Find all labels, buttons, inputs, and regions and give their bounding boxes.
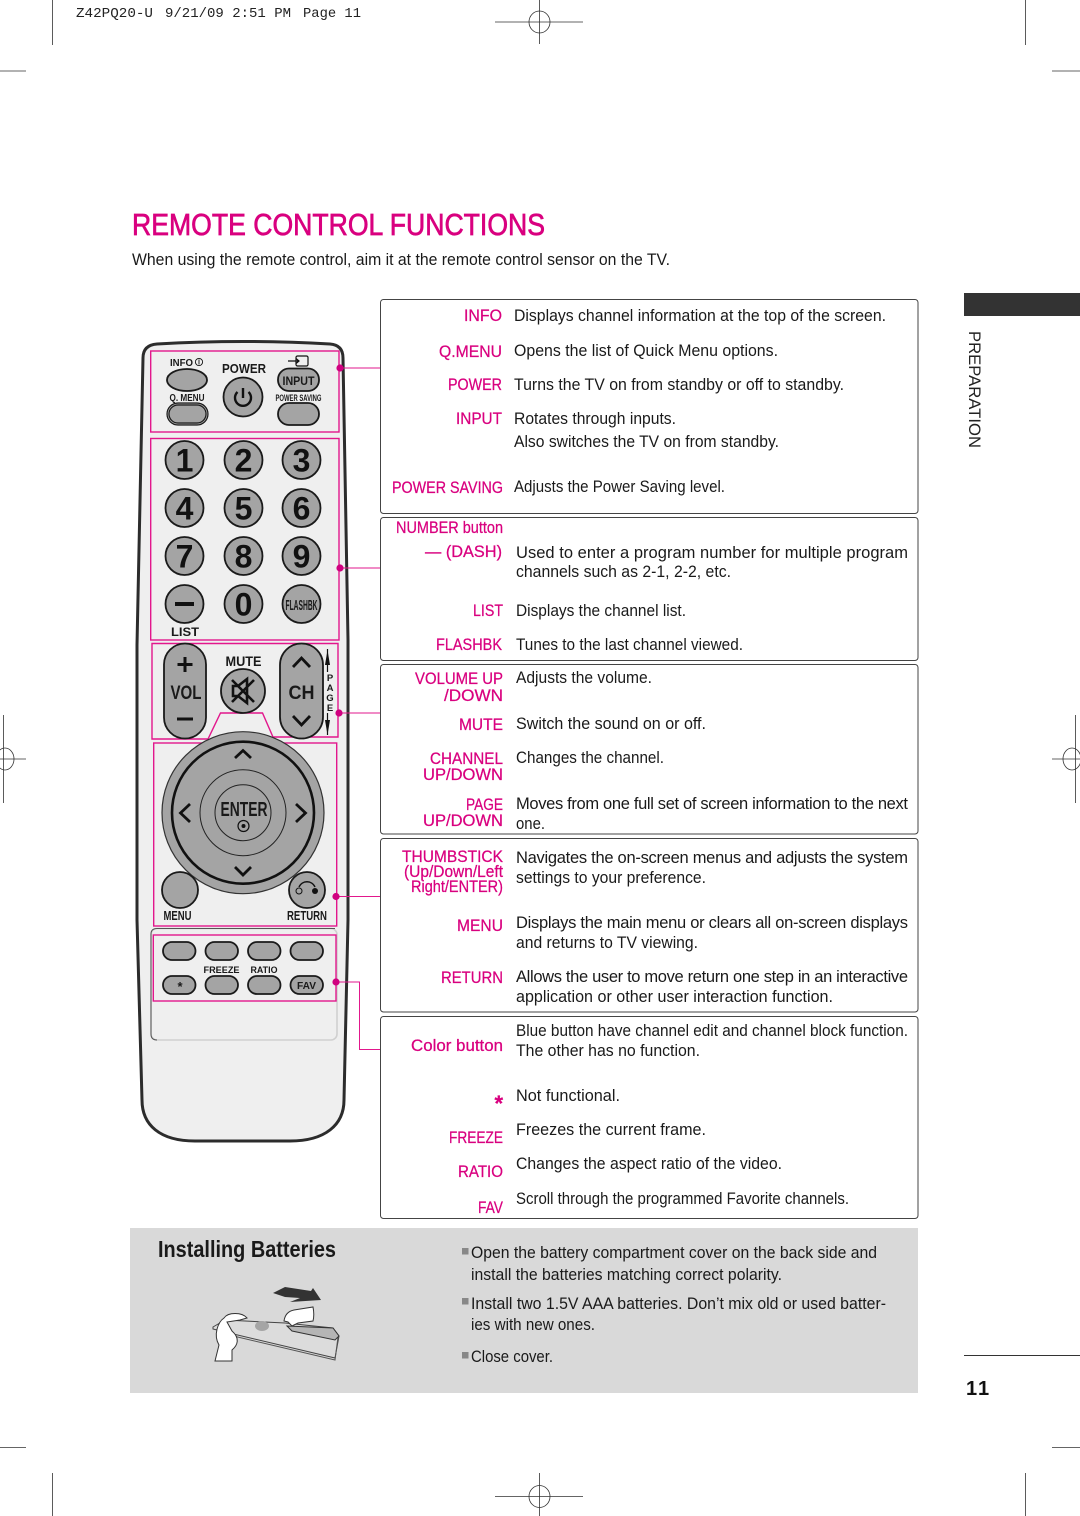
- panel: volume, mute, channel, page: one.: [516, 815, 545, 833]
- volume, mute and channel group: VOL: [170, 683, 202, 704]
- top button group: [151, 351, 339, 432]
- battery installation instructions: install the batteries matching correct polarity.: [471, 1266, 782, 1284]
- icon: battery cover removal: [213, 1287, 339, 1361]
- volume, mute and channel group: A: [327, 683, 334, 694]
- number keypad: 8: [235, 538, 252, 574]
- section tab: preparation: PREPARATION: [965, 331, 983, 448]
- panel: info and power functions: INPUT: [456, 410, 502, 428]
- volume, mute and channel group: P: [327, 673, 334, 684]
- volume, mute and channel group: [152, 644, 338, 739]
- footer rule: [964, 1354, 1080, 1356]
- panel: color buttons and extras: FAV: [478, 1199, 503, 1217]
- intro text: When using the remote control, aim it at the remote control sensor on the TV.: [132, 251, 670, 269]
- panel: thumbstick, menu, return: Displays the main menu or clears all on-screen displays: [516, 914, 908, 932]
- number keypad: 6: [293, 490, 310, 526]
- panel: thumbstick, menu, return: RETURN: [441, 969, 503, 987]
- panel: installing batteries: [130, 1228, 918, 1393]
- number keypad: 3: [293, 442, 310, 478]
- print slug line: [76, 7, 361, 22]
- panel: color buttons and extras: Not functional.: [516, 1087, 620, 1105]
- top button group: INPUT: [282, 374, 315, 388]
- page number: 11: [966, 1378, 991, 1400]
- panel: info and power functions: Adjusts the Power Saving level.: [514, 478, 725, 496]
- panel: color buttons and extras: RATIO: [458, 1163, 503, 1181]
- top button group: INFO: [170, 357, 193, 369]
- number keypad: LIST: [171, 625, 200, 639]
- panel: thumbstick, menu, return: [380, 838, 918, 1012]
- panel: color buttons and extras: FREEZE: [449, 1129, 503, 1147]
- panel: number buttons: [380, 518, 918, 660]
- panel: volume, mute, channel, page: VOLUME UP: [415, 670, 503, 688]
- number keypad: 9: [293, 538, 310, 574]
- panel: thumbstick, menu, return: Allows the user to move return one step in an interactive: [516, 968, 908, 986]
- top button group: POWER SAVING: [276, 393, 322, 404]
- panel: color buttons and extras: Color button: [411, 1037, 503, 1055]
- panel: volume, mute, channel, page: UP/DOWN: [423, 812, 503, 830]
- panel: info and power functions: Q.MENU: [439, 343, 502, 361]
- panel: thumbstick, menu, return: Right/ENTER): [411, 878, 503, 896]
- panel: color buttons and extras: [380, 1016, 918, 1218]
- panel: thumbstick, menu, return: THUMBSTICK: [402, 848, 503, 866]
- panel: thumbstick, menu, return: and returns to TV viewing.: [516, 934, 698, 952]
- number keypad: 4: [176, 490, 194, 526]
- panel: number buttons: Tunes to the last channel viewed.: [516, 636, 743, 654]
- navigation group: RETURN: [287, 909, 327, 923]
- remote control illustration: [137, 342, 348, 1141]
- panel: color buttons and extras: Scroll through the programmed Favorite channels.: [516, 1190, 849, 1208]
- panel: color buttons and extras: Changes the aspect ratio of the video.: [516, 1155, 782, 1173]
- battery installation instructions: Close cover.: [471, 1348, 553, 1366]
- panel: thumbstick, menu, return: settings to your preference.: [516, 869, 706, 887]
- colour and function button group: RATIO: [250, 965, 278, 976]
- title: REMOTE CONTROL FUNCTIONS: [132, 207, 545, 242]
- panel: info and power functions: [380, 300, 918, 514]
- panel: volume, mute, channel, page: CHANNEL: [430, 750, 503, 768]
- number keypad: [151, 438, 339, 640]
- number keypad: 0: [235, 586, 252, 622]
- panel: number buttons: LIST: [473, 602, 503, 620]
- number keypad: FLASHBK: [286, 597, 318, 614]
- section tab: preparation: [964, 293, 1080, 448]
- print slug line: Page 11: [303, 7, 361, 22]
- volume, mute and channel group: CH: [288, 683, 314, 704]
- panel: thumbstick, menu, return: Navigates the on-screen menus and adjusts the system: [516, 849, 908, 867]
- panel: volume, mute, channel, page: Changes the channel.: [516, 749, 664, 767]
- panel: info and power functions: Also switches the TV on from standby.: [514, 433, 779, 451]
- panel: color buttons and extras: Freezes the current frame.: [516, 1121, 706, 1139]
- panel: volume, mute, channel, page: Switch the sound on or off.: [516, 715, 706, 733]
- navigation group: ENTER: [220, 799, 268, 821]
- volume, mute and channel group: E: [327, 703, 333, 714]
- panel: thumbstick, menu, return: (Up/Down/Left: [404, 863, 503, 881]
- panel: number buttons: FLASHBK: [436, 636, 502, 654]
- batteries heading: Installing Batteries: [158, 1236, 336, 1262]
- top button group: POWER: [222, 362, 266, 376]
- battery installation instructions: [462, 1244, 886, 1366]
- colour and function button group: FAV: [297, 980, 316, 992]
- panel: volume, mute, channel, page: PAGE: [466, 796, 503, 814]
- print slug line: Z42PQ20-U: [76, 7, 153, 22]
- panel: info and power functions: INFO: [464, 307, 502, 325]
- panel: info and power functions: Rotates through inputs.: [514, 410, 676, 428]
- panel: volume, mute, channel, page: UP/DOWN: [423, 766, 503, 784]
- battery installation instructions: Open the battery compartment cover on the back side and: [471, 1244, 877, 1262]
- panel: info and power functions: Turns the TV on from standby or off to standby.: [514, 376, 844, 394]
- volume, mute and channel group: G: [326, 693, 334, 704]
- panel: info and power functions: POWER SAVING: [392, 479, 503, 497]
- connector lines: [332, 364, 380, 1049]
- panel: thumbstick, menu, return: MENU: [457, 917, 503, 935]
- navigation group: [154, 732, 337, 926]
- panel: number buttons: NUMBER button: [396, 519, 503, 537]
- colour and function button group: *: [177, 979, 183, 994]
- panel: thumbstick, menu, return: application or other user interaction function.: [516, 988, 833, 1006]
- battery installation instructions: Install two 1.5V AAA batteries. Don’t mix old or used batter-: [471, 1295, 886, 1313]
- panel: info and power functions: Displays channel information at the top of the screen.: [514, 307, 886, 325]
- number keypad: 5: [235, 490, 252, 526]
- panel: volume, mute, channel, page: MUTE: [459, 716, 503, 734]
- number keypad: 7: [176, 538, 193, 574]
- panel: volume, mute, channel, page: /DOWN: [444, 687, 503, 705]
- panel: info and power functions: Opens the list of Quick Menu options.: [514, 342, 778, 360]
- panel: color buttons and extras: Blue button have channel edit and channel block function.: [516, 1022, 908, 1040]
- panel: info and power functions: POWER: [448, 376, 502, 394]
- battery installation instructions: ies with new ones.: [471, 1316, 595, 1334]
- panel: volume, mute, channel, page: [380, 664, 918, 834]
- number keypad: 2: [235, 442, 252, 478]
- panel: volume, mute, channel, page: Moves from one full set of screen information to the next: [516, 795, 908, 813]
- panel: number buttons: — (DASH): [425, 543, 502, 561]
- panel: volume, mute, channel, page: Adjusts the volume.: [516, 669, 652, 687]
- panel: number buttons: Used to enter a program number for multiple program: [516, 544, 908, 562]
- navigation group: MENU: [164, 909, 192, 923]
- panel: number buttons: channels such as 2-1, 2-2, etc.: [516, 563, 731, 581]
- panel: color buttons and extras: The other has no function.: [516, 1042, 700, 1060]
- volume, mute and channel group: MUTE: [226, 653, 262, 669]
- print slug line: 9/21/09 2:51 PM: [165, 7, 291, 22]
- colour and function button group: [151, 928, 337, 1040]
- remote body: [137, 342, 348, 1141]
- top button group: Q. MENU: [170, 393, 204, 404]
- number keypad: 1: [176, 442, 193, 478]
- colour and function button group: FREEZE: [204, 965, 240, 976]
- panel: color buttons and extras: *: [494, 1091, 503, 1116]
- panel: number buttons: Displays the channel list.: [516, 602, 686, 620]
